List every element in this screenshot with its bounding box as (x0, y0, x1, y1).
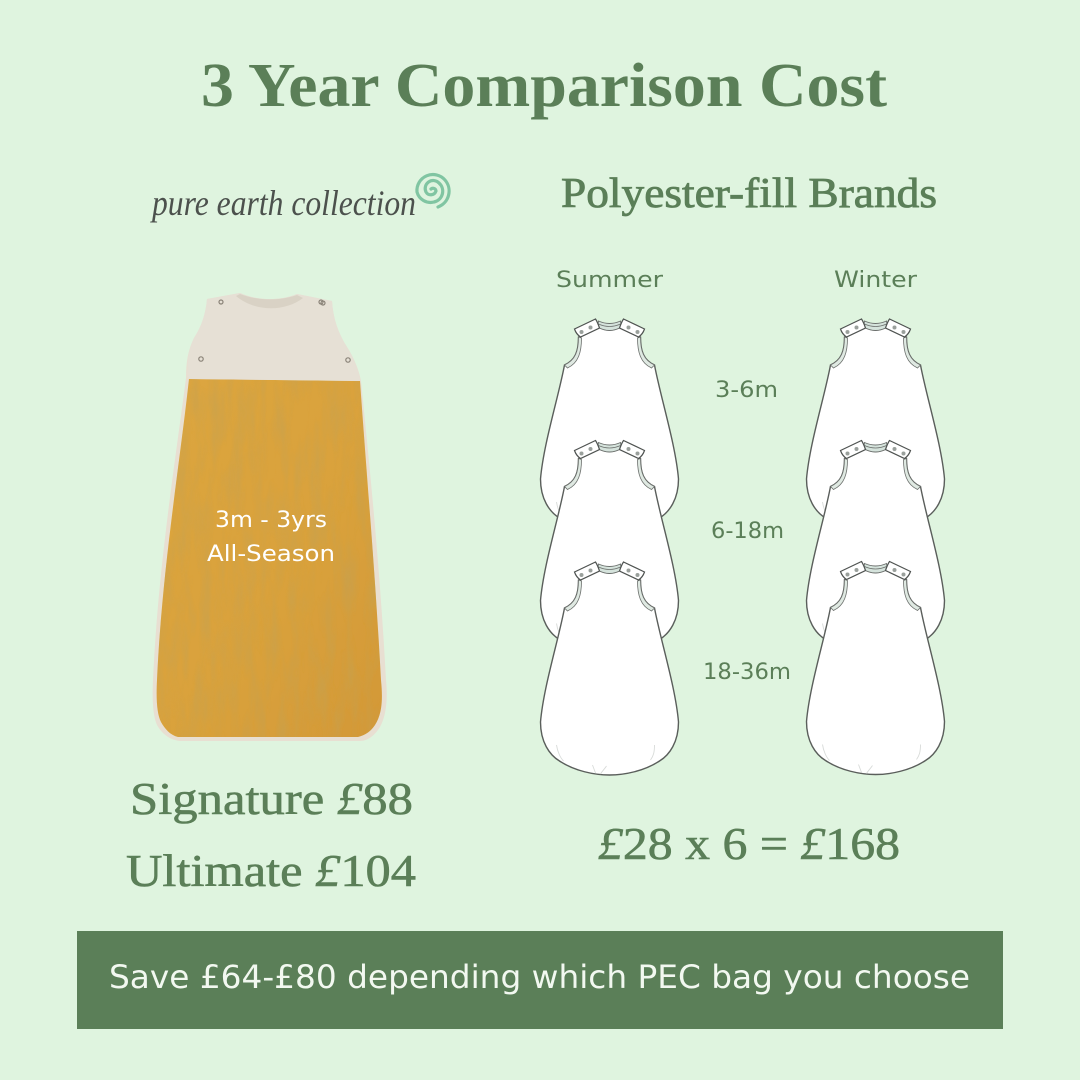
bag outer trim (153, 293, 387, 741)
size label: 6-18m: 6-18m (711, 519, 784, 544)
price: polyester total: £28 x 6 = £168 (598, 819, 900, 869)
summer bag 18-36m (540, 562, 678, 775)
winter bag 6-18m (806, 440, 944, 654)
winter bag 3-6m (806, 319, 944, 532)
size label: 3-6m: 3-6m (715, 378, 778, 403)
bag caption: season: All-Season (207, 542, 335, 567)
bag snaps (199, 300, 350, 362)
column label: winter: Winter (834, 268, 918, 293)
heading: polyester-fill brands: Polyester-fill Brands (561, 171, 937, 217)
logo spiral icon (417, 175, 449, 207)
price: ultimate: Ultimate £104 (126, 846, 416, 896)
banner text: Save £64-£80 depending which PEC bag you choose (109, 958, 970, 996)
summer bag illustrations (540, 319, 678, 775)
summer bag 6-18m (540, 440, 678, 654)
bag caption: age range: 3m - 3yrs (215, 508, 327, 533)
logo wordmark: pure earth collection (149, 183, 416, 223)
logo: pure earth collection (149, 175, 449, 223)
bag yoke (188, 293, 360, 381)
winter bag illustrations (806, 319, 944, 774)
bag neckline lining (236, 294, 303, 308)
size label: 18-36m: 18-36m (703, 660, 791, 685)
banner background (77, 931, 1003, 1029)
column label: summer: Summer (556, 268, 664, 293)
summer bag 3-6m (540, 319, 678, 532)
savings banner (77, 931, 1003, 1029)
winter bag 18-36m (806, 562, 944, 774)
price: signature: Signature £88 (130, 774, 413, 824)
bag orange body (157, 379, 382, 737)
title: 3 Year Comparison Cost (201, 52, 887, 120)
product photo: orange sleeping bag (153, 293, 387, 741)
